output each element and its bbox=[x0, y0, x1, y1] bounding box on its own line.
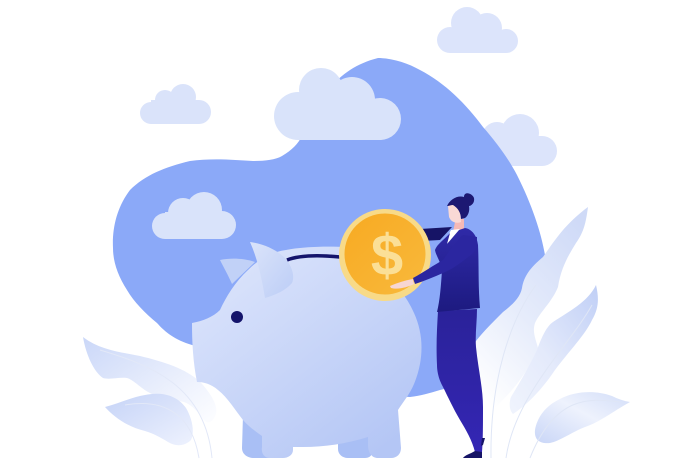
woman: jacket bbox=[435, 228, 480, 312]
coin: face bbox=[344, 214, 426, 294]
woman: neck bbox=[453, 217, 464, 232]
gold coin bbox=[339, 209, 431, 301]
pig: back ear bbox=[220, 259, 255, 284]
woman: blouse bbox=[446, 229, 460, 245]
woman: shoe heel bbox=[481, 438, 485, 446]
woman: trousers bbox=[437, 309, 483, 452]
woman: front hand over coin bbox=[390, 279, 414, 289]
right leaves bbox=[473, 207, 630, 458]
leaf stems left bbox=[100, 350, 212, 458]
pig: front ear bbox=[250, 242, 293, 298]
cloud: right, behind blob bbox=[482, 114, 557, 166]
pig: body bbox=[192, 247, 422, 458]
coin: dollar sign: $ bbox=[371, 223, 403, 288]
leaf: lower right bbox=[535, 392, 630, 443]
coin: rim bbox=[339, 209, 431, 301]
cloud: top right bbox=[437, 7, 518, 53]
leaf: lower left bbox=[105, 394, 193, 445]
piggy bank bbox=[192, 242, 422, 458]
pig: eye bbox=[231, 311, 243, 323]
woman: head bbox=[448, 205, 461, 223]
leaf: upper left bbox=[83, 337, 216, 422]
cloud: inside blob bbox=[152, 192, 236, 239]
leaf: large right bbox=[473, 207, 588, 412]
pig: front back foot bbox=[242, 415, 270, 458]
woman: back arm bbox=[420, 227, 452, 241]
leaf: middle right bbox=[510, 285, 598, 414]
cloud: upper left bbox=[140, 84, 211, 124]
woman figure bbox=[420, 193, 485, 458]
woman: shoe bbox=[463, 451, 482, 458]
background blob bbox=[113, 58, 545, 397]
woman: front arm bbox=[413, 235, 477, 284]
leaf veins and stems right bbox=[491, 285, 620, 458]
pig: rear back foot bbox=[338, 430, 372, 458]
cloud: large centre bbox=[274, 68, 401, 140]
pig: coin slot bbox=[287, 256, 340, 260]
left leaves bbox=[83, 337, 216, 458]
woman: hair bbox=[447, 193, 474, 219]
